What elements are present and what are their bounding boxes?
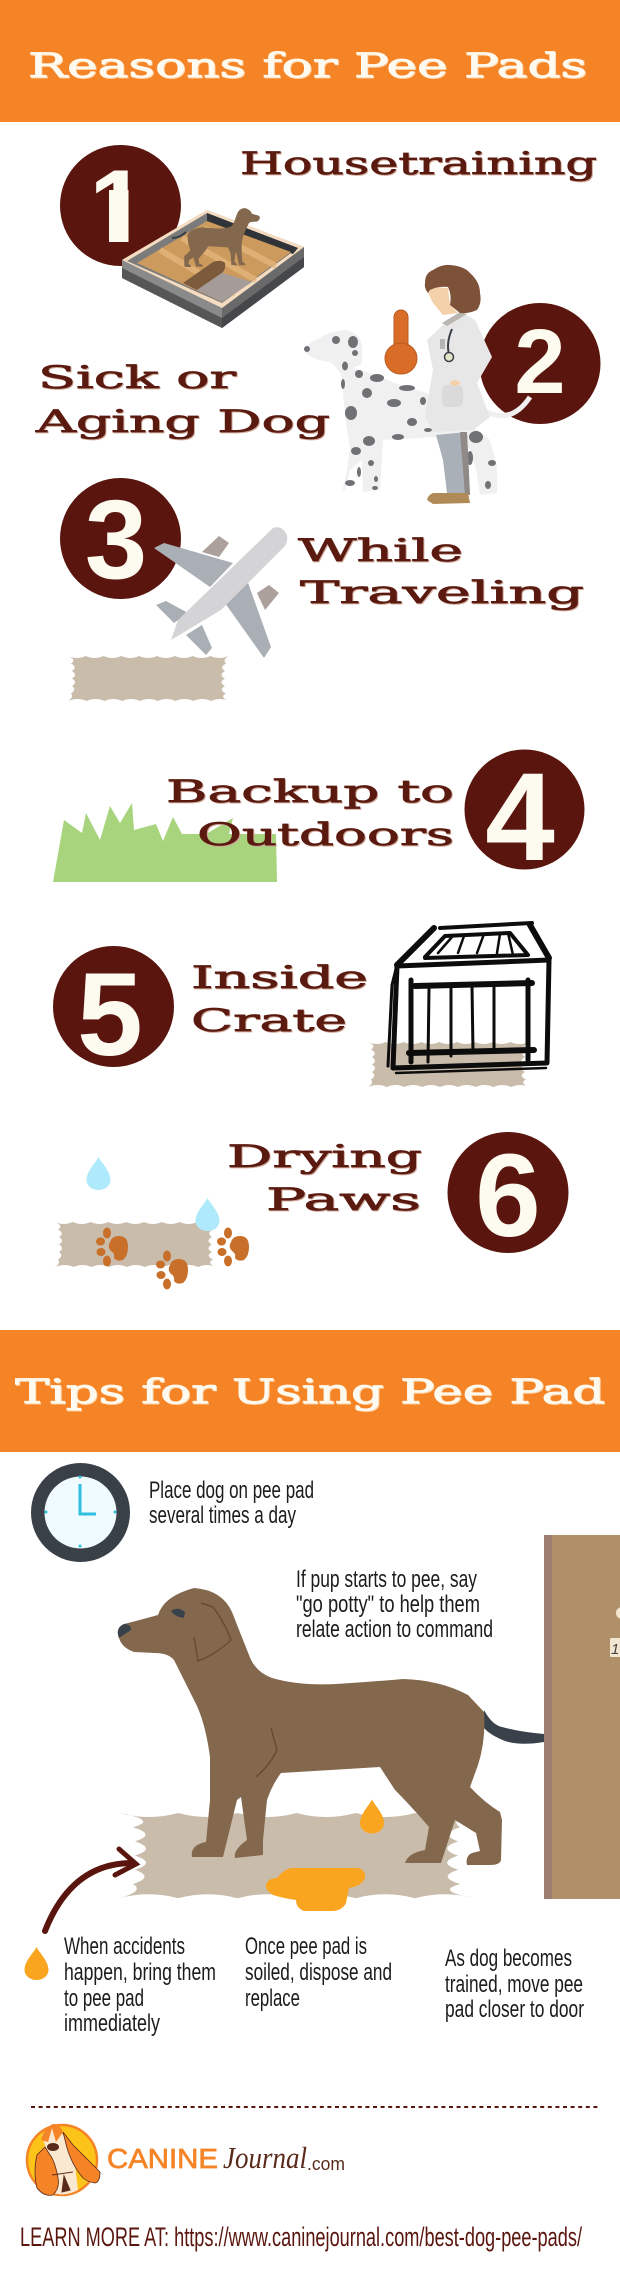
tip: dispose: soiled, dispose and xyxy=(245,1959,392,1986)
large pee pad xyxy=(119,1813,474,1898)
reason 5 number badge xyxy=(53,946,174,1081)
reason 3 number badge: 3 xyxy=(85,477,147,602)
tip: accidents: When accidents xyxy=(64,1933,185,1960)
icon: door xyxy=(544,1535,620,1899)
reason 2 number badge xyxy=(480,303,600,424)
reason 1 number badge xyxy=(60,145,181,266)
icon: water drops xyxy=(86,1157,220,1231)
tip: place dog on pad: Place dog on pee pad xyxy=(149,1477,314,1504)
reason 2 number badge: 2 xyxy=(514,311,566,413)
logo: Canine Journal xyxy=(27,2124,345,2195)
reason 3 number badge xyxy=(60,477,181,602)
icon: airplane xyxy=(154,527,287,658)
icon: pee puddle xyxy=(266,1868,365,1911)
heading: Sick or Aging Dog: Aging Dog xyxy=(34,404,330,440)
tip: dispose: replace xyxy=(245,1985,300,2012)
tip: accidents: happen, bring them xyxy=(64,1959,216,1986)
icon: dalmatian xyxy=(304,330,530,495)
illustration: brown dog xyxy=(118,1588,502,1865)
tip: accidents xyxy=(64,1933,216,2037)
heading: While Traveling: While xyxy=(298,533,463,569)
icon: dog crate xyxy=(388,923,549,1073)
heading: Drying Paws xyxy=(227,1139,422,1218)
heading: Housetraining: Housetraining xyxy=(240,146,597,182)
tip: accidents: to pee pad xyxy=(64,1985,144,2012)
tip: say go potty: relate action to command xyxy=(296,1616,493,1643)
heading: Inside Crate: Inside xyxy=(191,960,368,996)
icon: grass xyxy=(53,803,277,882)
tip: place dog on pad: several times a day xyxy=(149,1502,297,1529)
icon: veterinarian xyxy=(425,265,492,504)
heading: Sick or Aging Dog xyxy=(34,360,330,440)
icon: dog in litter box xyxy=(122,208,304,328)
heading: While Traveling xyxy=(298,533,584,611)
header banner: Reasons for Pee Pads xyxy=(0,0,620,122)
reason 4 number badge: 4 xyxy=(485,748,555,887)
heading: Backup to Outdoors: Outdoors xyxy=(197,817,454,853)
heading: Drying Paws: Paws xyxy=(266,1182,421,1218)
header banner: Reasons for Pee Pads: Reasons for Pee Pads xyxy=(28,46,587,86)
tip: accidents: immediately xyxy=(64,2010,161,2037)
heading: While Traveling: Traveling xyxy=(300,575,584,611)
tip: dispose: Once pee pad is xyxy=(245,1933,367,1960)
tip: dispose xyxy=(245,1933,392,2012)
arrow to pee pad xyxy=(45,1849,136,1931)
reason 4 number badge xyxy=(464,748,584,887)
pee pad under crate xyxy=(368,1042,529,1087)
logo: Canine Journal: .com xyxy=(307,2154,345,2174)
heading: Sick or Aging Dog: Sick or xyxy=(38,360,236,396)
icon: thermometer xyxy=(385,310,417,374)
pee pad under airplane xyxy=(68,656,229,701)
icon: dog tail xyxy=(484,1710,544,1744)
reason 6 number badge: 6 xyxy=(475,1130,541,1262)
heading: Inside Crate xyxy=(191,960,368,1039)
heading: Backup to Outdoors: Backup to xyxy=(166,774,454,810)
heading: Drying Paws: Drying xyxy=(227,1139,422,1175)
icon: clock xyxy=(31,1463,130,1562)
logo: Canine Journal: Journal xyxy=(223,2140,307,2175)
reason 6 number badge xyxy=(448,1130,568,1262)
reason 1 number badge: 1 xyxy=(89,149,147,265)
tip: say go potty: If pup starts to pee, say xyxy=(296,1566,478,1593)
icon: pee drop from dog xyxy=(360,1800,384,1834)
logo: Canine Journal: CANINE xyxy=(107,2143,218,2174)
header banner: Tips for Using Pee Pad: Tips for Using Pee Pad xyxy=(15,1372,605,1412)
tip: say go potty xyxy=(296,1566,493,1643)
heading: Inside Crate: Crate xyxy=(191,1003,347,1039)
header banner: Tips for Using Pee Pad xyxy=(0,1330,620,1452)
reason 5 number badge: 5 xyxy=(77,949,143,1081)
icon: accident drop xyxy=(24,1947,48,1980)
logo dog badge xyxy=(27,2124,100,2195)
pee pad with paw prints xyxy=(55,1222,249,1290)
tip: place dog on pad xyxy=(149,1477,314,1529)
icon: door: 1 xyxy=(611,1641,619,1658)
heading: Backup to Outdoors xyxy=(166,774,454,853)
tip: say go potty: "go potty" to help them xyxy=(296,1591,480,1618)
tip: move pad closer xyxy=(445,1945,584,2023)
